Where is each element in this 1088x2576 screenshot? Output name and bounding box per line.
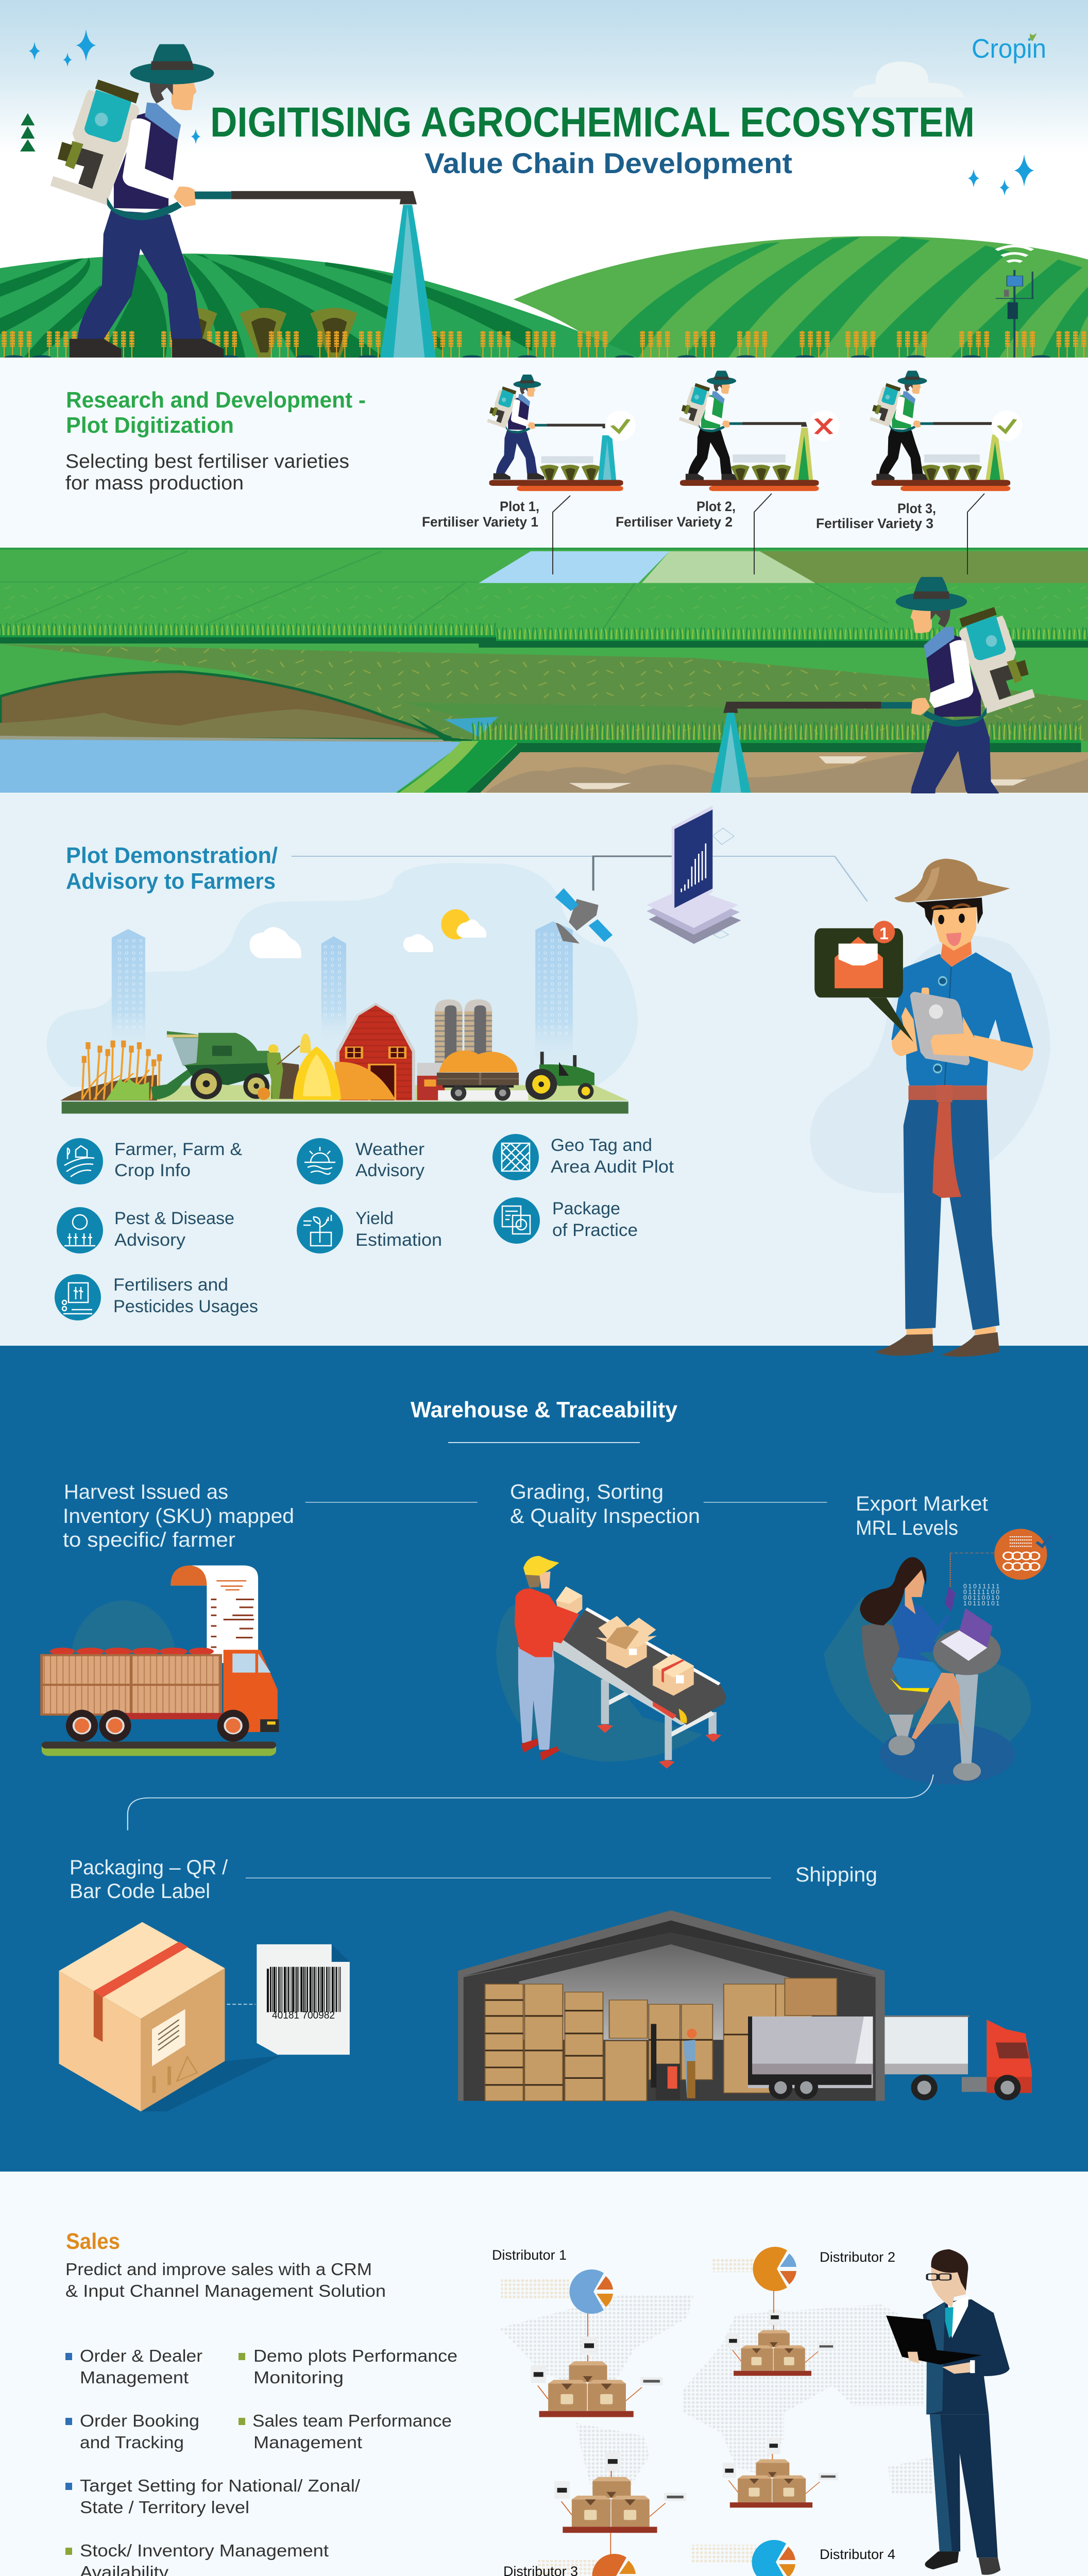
panel: research and development background [0, 358, 1088, 548]
panel: plot demonstration background [0, 793, 1088, 1347]
list: sales features: Management [80, 2368, 189, 2387]
heading: plot demonstration: Advisory to Farmers [66, 869, 276, 894]
hill: right striped field [506, 233, 1088, 359]
binary data: 01011111 [963, 1583, 999, 1590]
text: export market: MRL Levels [856, 1517, 958, 1539]
grass row lower [472, 721, 1081, 740]
plot labels: Plot 1, [500, 499, 539, 514]
data beams [112, 921, 573, 1064]
heading: warehouse and traceability: Warehouse & Traceability [411, 1397, 678, 1422]
list: advisory items: Weather [355, 1140, 424, 1159]
farm illustration [47, 863, 638, 1114]
list: advisory items: Crop Info [114, 1161, 191, 1180]
wheat row [4, 331, 1084, 358]
tablet, server and data links [292, 805, 868, 944]
logo: Cropin: Cropin [972, 34, 1046, 64]
soil mounds [4, 355, 1050, 360]
farmer with sprayer [50, 44, 417, 358]
text: sales intro [65, 2260, 386, 2300]
pie: distributor 4 [752, 2540, 795, 2576]
clouds and sun [250, 909, 486, 958]
icon: fertilisers [55, 1274, 101, 1320]
binary data: 00110010 [963, 1594, 999, 1601]
distribution map illustration [500, 2249, 1010, 2576]
heading: sales: Sales [66, 2229, 120, 2254]
plot labels [422, 499, 936, 531]
combine harvester [151, 1031, 299, 1100]
blob [47, 863, 638, 1087]
icon: pest disease [57, 1207, 103, 1253]
binary data [963, 1583, 999, 1607]
text: grading sorting [510, 1481, 700, 1528]
server platform [647, 887, 741, 944]
text: shipping: Shipping [795, 1863, 877, 1886]
plot labels: Fertiliser Variety 2 [616, 514, 733, 530]
light green plot [642, 551, 815, 583]
mirrored farmer [723, 577, 1035, 843]
text: sales intro: Predict and improve sales with a CRM [65, 2260, 372, 2279]
text: packaging: Bar Code Label [70, 1880, 210, 1903]
hay stacks [293, 1046, 396, 1100]
dotted world map [500, 2294, 933, 2507]
icon: yield estimation [297, 1207, 343, 1253]
fence [438, 1090, 528, 1100]
text: packaging [70, 1856, 228, 1903]
text: export market [856, 1493, 988, 1539]
hero illustration: fields, farmer and spray [0, 44, 1088, 360]
distributor labels: Distributor 1 [492, 2247, 567, 2263]
plot labels: Fertiliser Variety 3 [816, 516, 933, 531]
list: sales features: Management [253, 2433, 362, 2452]
panel: warehouse background [0, 1346, 1088, 2172]
plot 2 [679, 371, 840, 491]
list: sales features: Demo plots Performance [253, 2346, 457, 2365]
list: advisory items: Package [552, 1199, 620, 1218]
list: sales features: Sales team Performance [252, 2411, 452, 2430]
notification bubble [814, 921, 913, 1042]
panel: sales background [0, 2172, 1088, 2576]
pie: distributor 3 [592, 2554, 636, 2576]
plot 1 [487, 375, 636, 491]
green bank [397, 741, 519, 793]
list: advisory items: Fertilisers and [113, 1275, 228, 1295]
plot labels: Fertiliser Variety 1 [422, 514, 538, 530]
list: advisory items: Geo Tag and [551, 1136, 652, 1155]
list: advisory items: Estimation [355, 1230, 442, 1250]
text: selecting varieties: Selecting best fertiliser varieties [65, 451, 349, 472]
connector [128, 1774, 933, 1830]
soil strip [480, 752, 1088, 793]
list: advisory items [113, 1136, 674, 1316]
heading: research and development: Research and Development - [66, 387, 366, 413]
truck with receipt [42, 1565, 279, 1756]
spray jet [380, 205, 436, 358]
spray jet [710, 713, 751, 793]
title: DIGITISING AGROCHEMICAL ECOSYSTEM [210, 99, 975, 146]
sparkles [29, 29, 1034, 196]
icon: package of practice [494, 1197, 540, 1244]
woman at laptop [824, 1553, 1031, 1785]
conveyor inspection [496, 1556, 726, 1769]
pie: distributor 1 [569, 2269, 613, 2314]
tractor [525, 1052, 594, 1100]
field landscape with irrigation [0, 548, 1088, 843]
hill: left striped field [0, 251, 645, 359]
warehouse barcode number: 40181 700982 [272, 2010, 335, 2021]
plot illustrations [487, 371, 1022, 491]
warehouse and truck [458, 1910, 1032, 2101]
brown mound [0, 672, 451, 738]
text: harvest issued: Inventory (SKU) mapped [63, 1505, 294, 1528]
farmer figure with tablet [810, 859, 1050, 1357]
distributor labels: Distributor 4 [820, 2547, 895, 2562]
trees [20, 113, 36, 151]
leader lines [553, 494, 984, 574]
text: grading sorting: & Quality Inspection [510, 1505, 700, 1528]
list: advisory items: Yield [355, 1209, 394, 1228]
distributor 2 stock [727, 2310, 836, 2376]
barn [336, 1003, 415, 1100]
mid plot [0, 644, 1088, 741]
wheat crop [82, 1041, 159, 1100]
distributor 3 stock [554, 2452, 686, 2533]
list: advisory items: Farmer, Farm & [114, 1140, 242, 1159]
section: hero background [0, 0, 1088, 358]
hay trailer [437, 1050, 519, 1101]
text: packaging: Packaging – QR / [70, 1856, 228, 1879]
packaged box [59, 1922, 281, 2111]
binary data: 01111100 [963, 1588, 999, 1596]
text: harvest issued: to specific/ farmer [63, 1529, 235, 1551]
map highlights [501, 2259, 756, 2576]
list: sales features: Order Booking [80, 2411, 199, 2430]
distributor labels: Distributor 2 [820, 2249, 895, 2265]
heading: research and development: Plot Digitization [66, 413, 234, 438]
silos [435, 999, 492, 1063]
text: selecting varieties: for mass production [65, 472, 244, 494]
text: harvest issued [63, 1481, 294, 1551]
notification count: 1 [879, 924, 889, 943]
barcode label [257, 1944, 350, 2055]
plot 3 [870, 371, 1022, 491]
list: sales features: Order & Dealer [80, 2346, 202, 2365]
plot labels: Plot 3, [897, 501, 936, 516]
weather station sensor [996, 246, 1034, 358]
pond [0, 739, 465, 793]
warehouse illustrations [42, 1502, 1052, 2111]
olive plot [760, 551, 1088, 583]
text: selecting varieties [65, 451, 349, 494]
icon: weather [297, 1138, 343, 1184]
list: sales features: State / Territory level [80, 2498, 249, 2517]
list: advisory items: Pest & Disease [114, 1209, 234, 1228]
text: harvest issued: Harvest Issued as [64, 1481, 228, 1503]
distributor 1 stock [531, 2336, 662, 2417]
plants [170, 308, 358, 358]
icon: farmer farm crop [57, 1138, 103, 1184]
tablet with chart [672, 805, 734, 938]
MRL badge [994, 1529, 1052, 1580]
list: advisory items: of Practice [552, 1221, 638, 1240]
list: sales features: Stock/ Inventory Management [80, 2541, 329, 2560]
list: advisory items: Pesticides Usages [113, 1297, 258, 1316]
subtitle: Value Chain Development [424, 147, 792, 179]
list: sales features: and Tracking [80, 2433, 184, 2452]
text: export market: Export Market [856, 1493, 988, 1515]
satellite [555, 888, 613, 944]
list: advisory items: Advisory [114, 1230, 185, 1250]
heading: research and development [66, 387, 366, 438]
icon: geo tag [492, 1134, 539, 1180]
list: advisory items: Area Audit Plot [551, 1157, 674, 1177]
plot labels: Plot 2, [696, 499, 736, 514]
ground [60, 1075, 629, 1114]
distributor labels [492, 2247, 895, 2576]
distributor 4 stock [723, 2438, 838, 2507]
text: sales intro: & Input Channel Management Solution [65, 2281, 386, 2300]
heading: plot demonstration [66, 843, 278, 894]
heading: plot demonstration: Plot Demonstration/ [66, 843, 278, 868]
pie: distributor 2 [753, 2247, 796, 2291]
shed [417, 1063, 445, 1100]
businessman [886, 2249, 1010, 2575]
farm worker [267, 1033, 311, 1099]
list: sales features [65, 2346, 457, 2576]
grass row upper [0, 623, 1088, 648]
text: grading sorting: Grading, Sorting [510, 1481, 664, 1503]
cloud [853, 62, 964, 97]
list: sales features: Monitoring [253, 2368, 344, 2387]
connector lines [292, 856, 868, 902]
blue plot [479, 551, 670, 583]
list: sales features: Target Setting for National/ Zonal/ [80, 2476, 361, 2495]
list: advisory items: Advisory [355, 1161, 424, 1180]
binary data: 10110101 [963, 1600, 999, 1607]
